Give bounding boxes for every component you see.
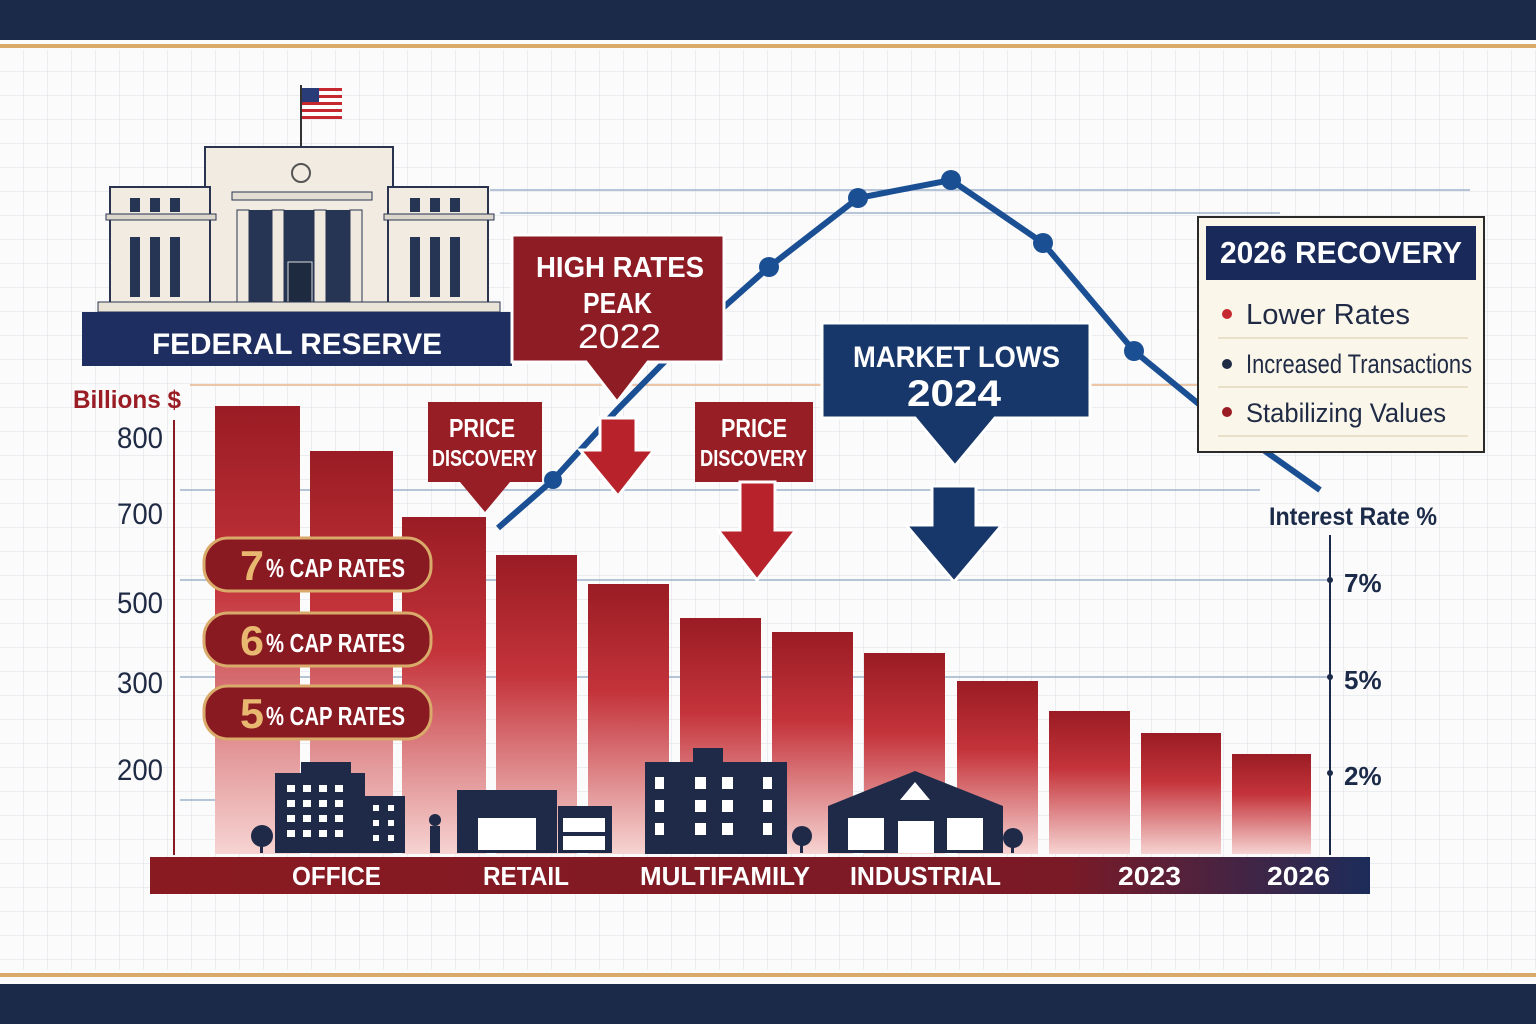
- callout: high rates peak 2022: HIGH RATES: [536, 252, 704, 284]
- x axis band: RETAIL: [483, 861, 569, 891]
- panel: 2026 recovery: [1198, 217, 1484, 452]
- cap rate labels: % CAP RATES: [266, 701, 405, 731]
- cap rate labels: % CAP RATES: [266, 628, 405, 658]
- bar chart: [215, 406, 1311, 854]
- callout: price discovery 1: DISCOVERY: [432, 445, 537, 471]
- callout: price discovery 2: [695, 402, 813, 482]
- arrow: red down 2: [718, 482, 796, 580]
- y axis labels: 500: [117, 587, 163, 620]
- callout: market lows 2024: 2024: [907, 373, 1001, 414]
- panel: 2026 recovery: Lower Rates: [1246, 299, 1410, 331]
- right axis: interest rate: [1269, 503, 1437, 855]
- federal reserve building: [98, 85, 500, 312]
- federal reserve label: [82, 312, 512, 366]
- x axis band: 2023: [1118, 861, 1181, 891]
- cap rate labels: % CAP RATES: [266, 553, 405, 583]
- callout: market lows 2024: MARKET LOWS: [853, 341, 1060, 374]
- x axis band: INDUSTRIAL: [850, 861, 1001, 891]
- interest rate line: [498, 170, 1320, 528]
- x axis band: [150, 857, 1370, 894]
- top band: [0, 0, 1536, 48]
- callout: high rates peak 2022: 2022: [578, 318, 661, 356]
- bottom band: [0, 973, 1536, 1024]
- cap rate labels: 7: [240, 542, 264, 589]
- right axis: interest rate: 7%: [1344, 568, 1382, 598]
- federal reserve label: FEDERAL RESERVE: [152, 328, 442, 361]
- callout: price discovery 1: PRICE: [449, 413, 515, 443]
- right axis: interest rate: 2%: [1344, 761, 1382, 791]
- callout: price discovery 2: DISCOVERY: [700, 445, 807, 471]
- callout: price discovery 2: PRICE: [721, 413, 787, 443]
- cap rate labels: [204, 538, 431, 739]
- right axis: interest rate: Interest Rate %: [1269, 503, 1437, 531]
- icon: multifamily: [645, 748, 812, 854]
- panel: 2026 recovery: Increased Transactions: [1246, 349, 1472, 379]
- callout: high rates peak 2022: [512, 235, 724, 402]
- cap rate labels: 6: [240, 617, 264, 664]
- y axis labels: [73, 386, 181, 855]
- y axis labels: 300: [117, 667, 163, 700]
- x axis band: 2026: [1267, 861, 1330, 891]
- icon: industrial warehouse: [828, 771, 1023, 853]
- arrow: blue down: [906, 486, 1002, 582]
- y axis labels: 200: [117, 754, 163, 787]
- callout: price discovery 1: [428, 402, 542, 512]
- icon: office buildings: [251, 762, 405, 853]
- y axis labels: 700: [117, 498, 163, 531]
- y axis labels: Billions $: [73, 386, 181, 414]
- arrow: red down 1: [580, 418, 654, 496]
- callout: market lows 2024: [822, 323, 1090, 466]
- y axis labels: 800: [117, 422, 163, 455]
- cap rate labels: 5: [240, 690, 264, 737]
- panel: 2026 recovery: Stabilizing Values: [1246, 398, 1446, 428]
- x axis band: MULTIFAMILY: [640, 861, 810, 891]
- x axis band: OFFICE: [292, 861, 381, 891]
- callout: high rates peak 2022: PEAK: [583, 288, 652, 320]
- right axis: interest rate: 5%: [1344, 665, 1382, 695]
- panel: 2026 recovery: 2026 RECOVERY: [1220, 235, 1462, 270]
- icon: retail stores: [429, 790, 612, 853]
